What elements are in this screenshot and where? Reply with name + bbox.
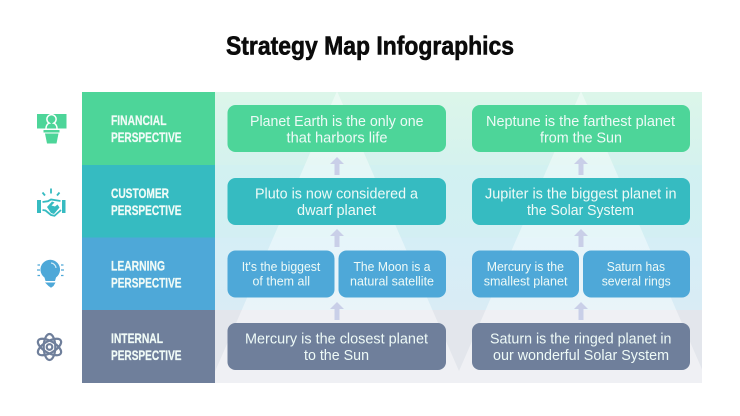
card: Saturn ringed: Saturn is the ringed planet in: [490, 330, 672, 347]
card: Saturn ringed: [472, 323, 690, 370]
card: Jupiter: [472, 178, 690, 225]
card: The Moon: The Moon is a: [354, 259, 431, 274]
card: Jupiter: Jupiter is the biggest planet in: [485, 185, 676, 202]
card: Mercury closest: to the Sun: [304, 347, 369, 364]
panel: learning perspective label: LEARNING: [111, 258, 165, 274]
card: Mercury closest: Mercury is the closest planet: [245, 330, 429, 347]
card: It's the biggest: [228, 250, 334, 298]
panel: internal perspective label: PERSPECTIVE: [111, 348, 182, 363]
card: Mercury small: smallest planet: [484, 274, 568, 289]
card: Planet Earth: that harbors life: [286, 130, 388, 147]
panel: learning perspective label: [82, 238, 215, 310]
card: Neptune: Neptune is the farthest planet: [486, 113, 676, 130]
panel: customer perspective label: PERSPECTIVE: [111, 203, 182, 218]
panel: financial perspective label: PERSPECTIVE: [111, 130, 182, 145]
icon: light bulb: [37, 260, 64, 288]
card: Neptune: from the Sun: [540, 130, 622, 147]
card: Planet Earth: [228, 105, 446, 152]
panel: financial perspective label: FINANCIAL: [111, 113, 166, 128]
card: Jupiter: the Solar System: [527, 202, 634, 219]
panel: internal perspective label: INTERNAL: [111, 331, 163, 346]
card: It's the biggest: It's the biggest: [242, 259, 321, 274]
icon: handshake: [37, 188, 66, 216]
card: Saturn rings: several rings: [602, 274, 671, 289]
arrows: right column: [574, 157, 588, 320]
icon: podium speaker: [37, 114, 66, 144]
card: Planet Earth: Planet Earth is the only one: [250, 113, 424, 130]
card: The Moon: natural satellite: [350, 274, 434, 289]
panel: internal perspective label: [82, 310, 215, 383]
panel: customer perspective label: CUSTOMER: [111, 186, 169, 201]
pyramid backgrounds: [210, 91, 708, 383]
card: Mercury small: [472, 250, 579, 298]
arrows: left column: [330, 157, 344, 320]
card: Pluto: dwarf planet: [297, 202, 377, 219]
panel: background bands: [215, 92, 702, 383]
card: The Moon: [338, 250, 446, 298]
card: It's the biggest: of them all: [252, 274, 310, 289]
panel: learning perspective label: PERSPECTIVE: [111, 276, 182, 290]
title: Strategy Map Infographics: [226, 30, 514, 60]
card: Saturn rings: [583, 250, 690, 298]
card: Saturn ringed: our wonderful Solar System: [493, 347, 669, 364]
card: Mercury small: Mercury is the: [487, 259, 564, 274]
card: Mercury closest: [228, 323, 446, 370]
icon: atom: [35, 334, 64, 360]
card: Saturn rings: Saturn has: [607, 259, 665, 274]
card: Neptune: [472, 105, 690, 152]
card: Pluto: Pluto is now considered a: [255, 185, 419, 202]
panel: financial perspective label: [82, 92, 215, 165]
panel: customer perspective label: [82, 165, 215, 238]
card: Pluto: [228, 178, 446, 225]
